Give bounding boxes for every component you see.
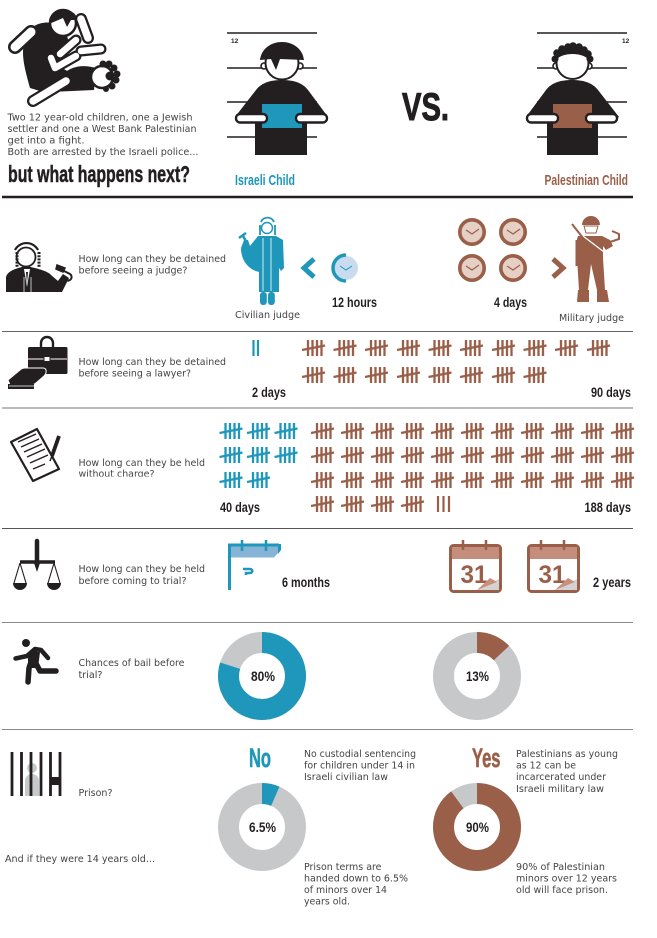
arrow: less than	[304, 259, 314, 277]
tally: 2 days	[254, 340, 258, 356]
icon: two calendars: 31	[538, 561, 566, 589]
icon: civilian judge	[239, 218, 284, 305]
text: no custodial sentencing: Israeli civilian law	[304, 772, 388, 783]
row: detained before seeing a judge	[6, 216, 624, 324]
icon: briefcase and book	[8, 337, 68, 389]
text: 90% of Palestinian minors: 90% of Palestinian	[516, 862, 605, 873]
text: Palestinians as young as 12: as 12 can be	[516, 760, 576, 772]
question: Prison?	[78, 788, 112, 799]
donut: 90%: 90%	[466, 819, 489, 835]
icon: running figure	[16, 639, 56, 682]
icon: document and pen	[11, 429, 59, 481]
text: prison terms: years old.	[304, 896, 350, 908]
text: prison terms: of minors over 14	[304, 885, 387, 896]
question	[78, 254, 226, 276]
text: prison terms: Prison terms are	[304, 862, 382, 873]
row: held before trial	[13, 540, 631, 592]
donut: 13%: 13%	[466, 668, 489, 684]
donut: 6.5%	[228, 794, 296, 860]
mugshot: Palestinian child	[526, 33, 630, 155]
question	[78, 564, 205, 587]
value: 188 days: 188 days	[584, 499, 631, 515]
text: no custodial sentencing: for children under 14 in	[304, 760, 415, 772]
icon: two children fighting	[15, 10, 120, 101]
question: How long can they be detained	[78, 357, 226, 368]
question: How long can they be detained	[78, 254, 226, 265]
header panel	[7, 10, 630, 189]
note: if 14 years old: And if they were 14 years old...	[5, 854, 155, 865]
icon: two calendars	[450, 540, 578, 592]
icon: judge with gavel	[6, 243, 72, 292]
value: 2 years: 2 years	[593, 574, 631, 590]
row: chances of bail	[16, 639, 510, 710]
donut: 80%: 80%	[251, 668, 275, 684]
icon: military judge soldier	[572, 216, 619, 302]
text: Palestinians as young as 12: Palestinians as young	[516, 749, 618, 760]
icon: prison bars	[12, 752, 60, 796]
text: Palestinians as young as 12: incarcerated under	[516, 772, 607, 783]
value: 12 hours: 12 hours	[332, 294, 377, 310]
label: Military judge: Military judge	[559, 313, 624, 324]
intro text: Both are arrested by the Israeli police...	[8, 147, 198, 158]
tally: 40 days	[220, 423, 298, 488]
intro text: get into a fight.	[8, 136, 84, 146]
mugshot: Israeli child: 12	[231, 38, 239, 45]
icon: scales	[13, 541, 61, 590]
question: Chances of bail before	[78, 658, 184, 669]
question: before seeing a lawyer?	[78, 368, 191, 380]
icon: four clocks	[460, 220, 525, 280]
answer: Yes: Yes	[472, 743, 500, 773]
value: 40 days: 40 days	[220, 499, 260, 515]
label: Civilian judge: Civilian judge	[235, 310, 300, 321]
question: before seeing a judge?	[78, 266, 188, 276]
text: 90% of Palestinian minors: minors over 12 years	[516, 874, 617, 884]
intro text: Two 12 year-old children, one a Jewish	[7, 112, 192, 124]
question	[78, 357, 226, 380]
arrow: greater than	[553, 259, 563, 277]
icon: two calendars: 31	[460, 561, 488, 589]
row: prison	[5, 743, 618, 908]
VS.: VS.	[402, 86, 449, 129]
text: Palestinians as young as 12: Israeli military law	[516, 784, 604, 795]
text: no custodial sentencing: No custodial sentencing	[304, 749, 416, 760]
donut: 6.5%: 6.5%	[249, 819, 276, 835]
intro text: settler and one a West Bank Palestinian	[8, 124, 196, 135]
row: held without charge	[11, 423, 634, 515]
value: 2 days: 2 days	[252, 384, 286, 400]
value: 4 days: 4 days	[494, 294, 527, 310]
answer: No: No	[249, 743, 271, 773]
text: no custodial sentencing	[304, 749, 416, 783]
text: Palestinians as young as 12	[516, 749, 618, 795]
question, cropped	[78, 458, 204, 477]
donut: 13%	[444, 642, 510, 710]
text: 90% of Palestinian minors	[516, 862, 617, 896]
question	[78, 658, 184, 681]
question: before coming to trial?	[78, 576, 186, 587]
mugshot: Israeli child	[227, 33, 328, 155]
tally: 188 days	[311, 423, 634, 512]
value: 6 months: 6 months	[282, 574, 330, 590]
icon: cropped blue calendar	[230, 540, 281, 590]
question: trial?	[78, 670, 102, 681]
donut: 80%	[228, 642, 296, 710]
row: detained before seeing a lawyer	[8, 337, 631, 400]
question, cropped: How long can they be held	[78, 458, 205, 469]
text: prison terms	[304, 862, 408, 908]
mugshot: Palestinian child: 12	[622, 38, 630, 45]
value: 90 days: 90 days	[591, 384, 631, 400]
tally: 90 days	[302, 340, 610, 383]
text: 90% of Palestinian minors: old will face prison.	[516, 885, 608, 896]
intro text	[7, 112, 198, 158]
text: prison terms: handed down to 6.5%	[304, 874, 408, 884]
label: Israeli Child: Israeli Child	[235, 172, 295, 189]
donut: 90%	[444, 794, 510, 860]
icon: half-day clock	[333, 255, 358, 281]
question, cropped: without charge?	[78, 469, 154, 480]
heading: but what happens next?: but what happens next?	[8, 161, 190, 187]
question: How long can they be held	[78, 564, 205, 575]
